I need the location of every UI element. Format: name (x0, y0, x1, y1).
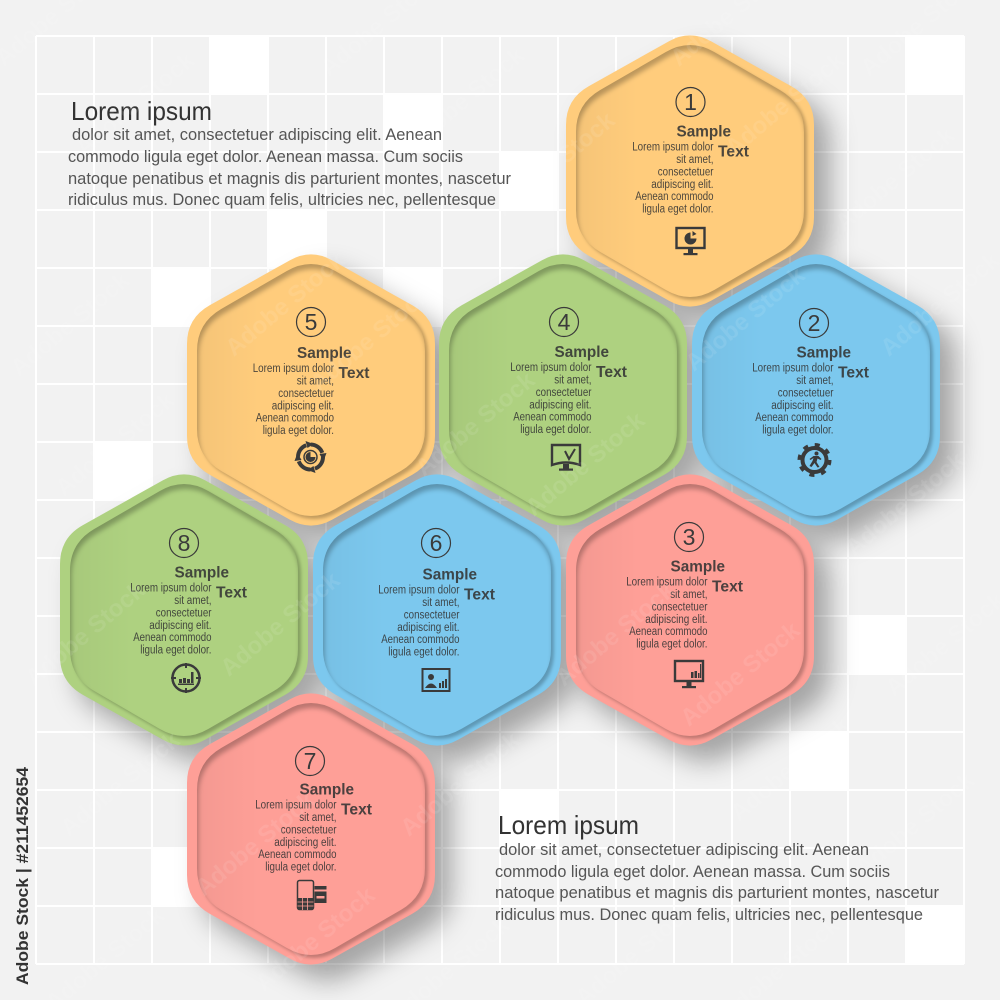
watermark: Adobe Stock (305, 281, 436, 397)
text: sample 5: Lorem ipsum dolor (253, 363, 334, 375)
watermark: Adobe Stock (520, 406, 651, 522)
heading: bottom right: Lorem ipsum (498, 810, 639, 840)
number 7 (296, 746, 324, 776)
text: sample 7: Aenean commodo (258, 849, 336, 861)
text: sample 1: Sample (676, 124, 731, 140)
text: sample 7: Lorem ipsum dolor (255, 800, 337, 812)
watermark: Adobe Stock (830, 121, 961, 237)
text: sample 7: consectetuer (281, 824, 337, 836)
text: sample 3: adipiscing elit. (645, 614, 708, 626)
text: sample 7: adipiscing elit. (274, 837, 336, 849)
text: sample 3: Sample (670, 558, 725, 576)
text: sample 4: sit amet, (554, 374, 592, 386)
watermark: Adobe Stock (55, 726, 186, 842)
text: sample 5: sit amet, (297, 376, 334, 388)
text: sample 3: sit amet, (670, 589, 708, 601)
text: sample 2: Aenean commodo (755, 412, 834, 424)
hexagon 8: green (0, 415, 386, 815)
text: sample 5: adipiscing elit. (272, 400, 334, 412)
number 5: 5 (305, 309, 317, 335)
number 5 (296, 308, 326, 336)
text: sample 4 (510, 344, 628, 436)
paragraph: top left: natoque penatibus et magnis dis parturient montes, nascetur (68, 169, 511, 188)
text: sample 6: Aenean commodo (381, 634, 460, 646)
text: sample 7: Text (341, 802, 373, 818)
watermark: Adobe Stock (725, 711, 856, 827)
text: sample 8: adipiscing elit. (149, 620, 212, 632)
text: sample 3: Aenean commodo (629, 626, 708, 638)
text: sample 7 (255, 782, 373, 874)
paragraph: bottom right: dolor sit amet, consectetuer adipiscing elit. Aenean (499, 840, 869, 859)
number 3 (674, 522, 704, 552)
text: sample 2: sit amet, (796, 375, 834, 387)
text: sample 3: Text (712, 578, 744, 596)
watermark: Adobe Stock (5, 266, 136, 382)
text block: top left (68, 96, 511, 209)
number 1 (676, 88, 705, 116)
text: sample 2: Lorem ipsum dolor (752, 362, 834, 374)
heading: top left: Lorem ipsum (71, 96, 212, 126)
text: sample 8 (130, 564, 248, 656)
text: sample 6: Sample (422, 566, 477, 584)
icon: cycle arrows with clock (294, 441, 326, 473)
text: sample 2: Sample (796, 344, 851, 362)
icon: monitor with pie chart (676, 228, 704, 255)
watermark: Adobe Stock (680, 261, 811, 377)
watermark: Adobe Stock (220, 246, 351, 362)
icon: curved monitor with check (552, 445, 580, 471)
paragraph: bottom right: natoque penatibus et magnis dis parturient montes, nascetur (495, 883, 939, 902)
hexagon 7: pink (112, 634, 512, 1000)
text: sample 5 (253, 345, 370, 437)
text: sample 1: Text (718, 144, 750, 160)
watermark: Adobe Stock (720, 46, 851, 162)
text: sample 4: Lorem ipsum dolor (510, 362, 592, 374)
watermark: Adobe Stock (190, 786, 321, 902)
text: sample 1: adipiscing elit. (651, 179, 714, 191)
text: sample 5: Sample (297, 345, 352, 362)
hexagon 4: green (364, 195, 764, 595)
text: sample 8: Text (216, 584, 248, 602)
text: sample 4: ligula eget dolor. (520, 424, 592, 436)
paragraph: top left: commodo ligula eget dolor. Aenean massa. Cum sociis (68, 147, 463, 166)
text: sample 2: ligula eget dolor. (762, 424, 834, 436)
text: sample 2: adipiscing elit. (771, 400, 834, 412)
text: sample 1 (632, 124, 750, 216)
text: sample 1: consectetuer (658, 166, 714, 178)
text: sample 7: sit amet, (299, 812, 336, 824)
text: sample 4: adipiscing elit. (529, 400, 592, 412)
number 4 (550, 308, 578, 336)
text: sample 8: ligula eget dolor. (140, 644, 212, 656)
text: sample 7: ligula eget dolor. (265, 862, 336, 874)
text: sample 5: Aenean commodo (256, 412, 334, 424)
text: sample 6: ligula eget dolor. (388, 646, 460, 658)
paragraph: top left: ridiculus mus. Donec quam felis, ultricies nec, pellentesque (68, 190, 496, 209)
paragraph: top left (68, 125, 511, 209)
text: sample 8: Lorem ipsum dolor (130, 582, 212, 594)
text: sample 8: Sample (174, 564, 229, 582)
text block: bottom right (495, 810, 939, 924)
text: sample 6: sit amet, (422, 597, 460, 609)
text: sample 5: consectetuer (278, 388, 334, 400)
text: sample 1: Aenean commodo (635, 191, 714, 203)
number 1: 1 (684, 89, 697, 115)
text: sample 2 (752, 344, 870, 436)
hexagon 1: orange (492, 0, 892, 376)
text: sample 1: ligula eget dolor. (642, 204, 714, 216)
text: sample 3 (626, 558, 744, 650)
watermark: Adobe Stock (215, 566, 346, 682)
paragraph: bottom right: ridiculus mus. Donec quam felis, ultricies nec, pellentesque (495, 905, 923, 924)
text: sample 5: ligula eget dolor. (263, 425, 334, 437)
watermark: Adobe Stock (20, 576, 151, 692)
number 7: 7 (304, 748, 316, 774)
text: sample 6 (378, 566, 496, 658)
number 6 (422, 528, 450, 558)
icon: monitor with bars (675, 661, 703, 688)
text: sample 4: Text (596, 364, 628, 381)
paragraph: bottom right (495, 840, 939, 924)
text: sample 8: consectetuer (156, 608, 212, 620)
icon: target with bars (171, 663, 201, 693)
watermark: Adobe Stock (410, 366, 541, 482)
number 3: 3 (683, 524, 695, 550)
watermark: Adobe Stock (550, 576, 681, 692)
text: sample 3: ligula eget dolor. (636, 638, 708, 650)
watermark: Adobe Stock (400, 41, 531, 157)
text: sample 5: Text (338, 365, 370, 382)
watermark: Adobe Stock (675, 616, 806, 732)
paragraph: top left: dolor sit amet, consectetuer adipiscing elit. Aenean (72, 125, 442, 144)
text: sample 1: Lorem ipsum dolor (632, 142, 714, 154)
text: sample 6: Lorem ipsum dolor (378, 584, 460, 596)
icon: framed presentation (422, 669, 450, 691)
text: sample 6: consectetuer (404, 610, 460, 622)
number 2 (800, 308, 828, 338)
text: sample 8: Aenean commodo (133, 632, 212, 644)
text: sample 2: consectetuer (778, 388, 834, 400)
watermark: Adobe Stock (395, 726, 526, 842)
text: sample 3: Lorem ipsum dolor (626, 576, 708, 588)
text: sample 6: Text (464, 586, 496, 604)
number 8 (170, 528, 198, 558)
text: sample 7: Sample (300, 782, 354, 798)
watermark: Adobe Stock (490, 106, 621, 222)
hexagon 2: blue (618, 195, 1000, 595)
hexagon 3: pink (492, 415, 892, 815)
text: sample 6: adipiscing elit. (397, 622, 460, 634)
watermark: Adobe Stock (70, 46, 201, 162)
text: sample 4: consectetuer (536, 387, 592, 399)
hexagon 5: orange (112, 195, 512, 595)
icon: gear with runner (800, 445, 830, 475)
text: sample 4: Aenean commodo (513, 412, 592, 424)
watermark: Adobe Stock (250, 881, 381, 997)
text: sample 2: Text (838, 364, 870, 382)
paragraph: bottom right: commodo ligula eget dolor. Aenean massa. Cum sociis (495, 862, 890, 881)
watermark: Adobe Stock (840, 446, 971, 562)
text: sample 1: sit amet, (676, 154, 714, 166)
number 6: 6 (430, 530, 442, 556)
number 2: 2 (808, 310, 820, 336)
number 4: 4 (558, 309, 571, 335)
watermark: Adobe Stock (50, 386, 181, 502)
number 8: 8 (178, 530, 190, 556)
text: sample 3: consectetuer (652, 602, 708, 614)
credit: vertical stock id: Adobe Stock | #211452654 (13, 766, 32, 985)
text: sample 4: Sample (554, 344, 609, 361)
text: sample 8: sit amet, (174, 595, 212, 607)
icon: phone and card (298, 880, 326, 910)
hexagon 6: blue (238, 415, 638, 815)
watermark: Adobe Stock (850, 766, 981, 882)
